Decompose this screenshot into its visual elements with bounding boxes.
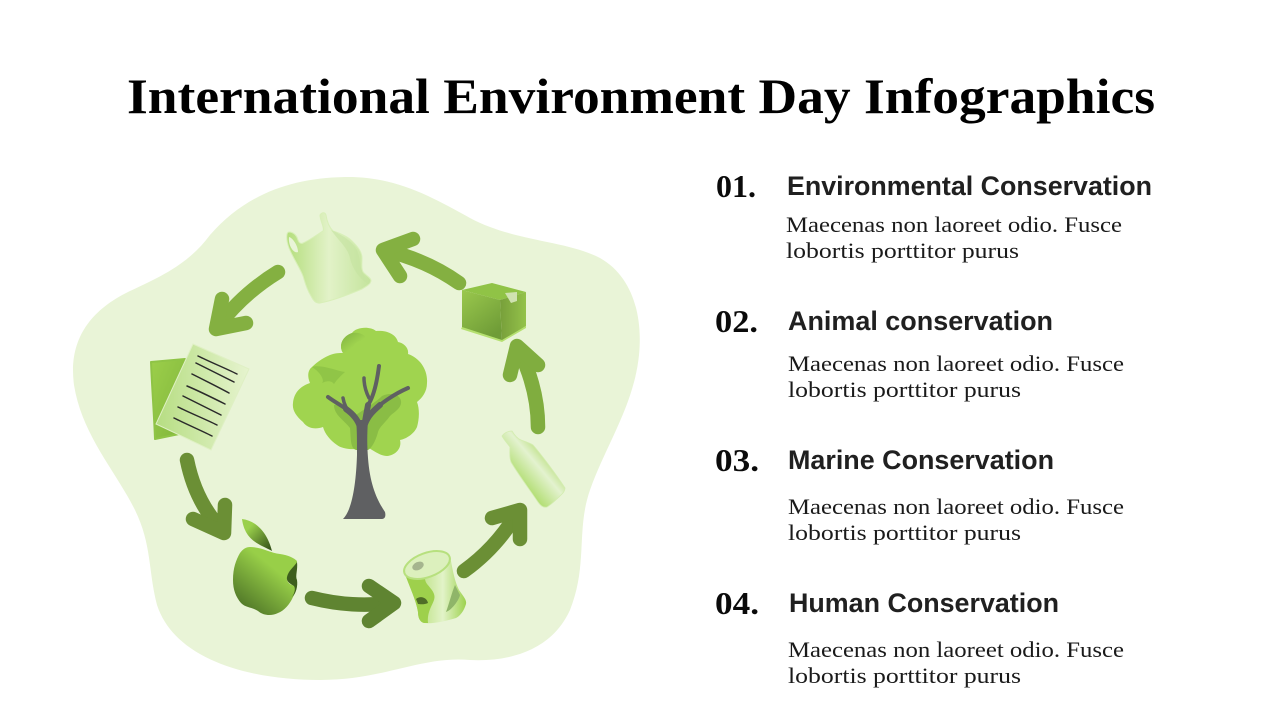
- list item 02: [715, 303, 1124, 402]
- arrow: box to bag: [383, 239, 459, 283]
- panel: recycling cycle illustration: [73, 177, 640, 680]
- foliage: [293, 328, 427, 456]
- icon: cardboard box: [461, 283, 526, 342]
- number 04: 04.: [715, 585, 759, 621]
- number 01: 01.: [716, 168, 756, 204]
- body text 03: lobortis porttitor purus: [788, 520, 1021, 545]
- trunk and branches: [343, 420, 385, 519]
- icon: tree: [293, 328, 427, 519]
- arrow: paper to apple: [187, 460, 225, 533]
- icon: bottle: [502, 431, 565, 507]
- number 02: 02.: [715, 303, 758, 339]
- body text 01: lobortis porttitor purus: [786, 238, 1019, 263]
- heading: Human Conservation: Human Conservation: [789, 588, 1059, 618]
- arrow: apple to can: [312, 586, 394, 621]
- body text 02: lobortis porttitor purus: [788, 377, 1021, 402]
- heading: Marine Conservation: Marine Conservation: [788, 445, 1054, 475]
- body text 01: Maecenas non laoreet odio. Fusce: [786, 212, 1122, 237]
- arrow: can to bottle: [464, 510, 520, 571]
- number 03: 03.: [715, 442, 759, 478]
- icon: apple core: [233, 519, 297, 615]
- body text 03: Maecenas non laoreet odio. Fusce: [788, 494, 1124, 519]
- arrow: bottle to box: [510, 346, 538, 427]
- body text 04: Maecenas non laoreet odio. Fusce: [788, 637, 1124, 662]
- list item 03: [715, 442, 1124, 545]
- body text 02: Maecenas non laoreet odio. Fusce: [788, 351, 1124, 376]
- body text 04: lobortis porttitor purus: [788, 663, 1021, 688]
- background blob: [73, 177, 640, 680]
- title: International Environment Day Infographics: [127, 68, 1155, 124]
- arrow: bag to paper: [216, 272, 278, 329]
- icon: plastic bag: [287, 213, 371, 303]
- list item 04: [715, 585, 1124, 688]
- icon: paper document: [151, 344, 249, 450]
- heading: Environmental Conservation: Environmental Conservation: [787, 171, 1152, 201]
- list item 01: [716, 168, 1152, 263]
- heading: Animal conservation: Animal conservation: [788, 306, 1053, 336]
- icon: crushed can: [400, 546, 466, 623]
